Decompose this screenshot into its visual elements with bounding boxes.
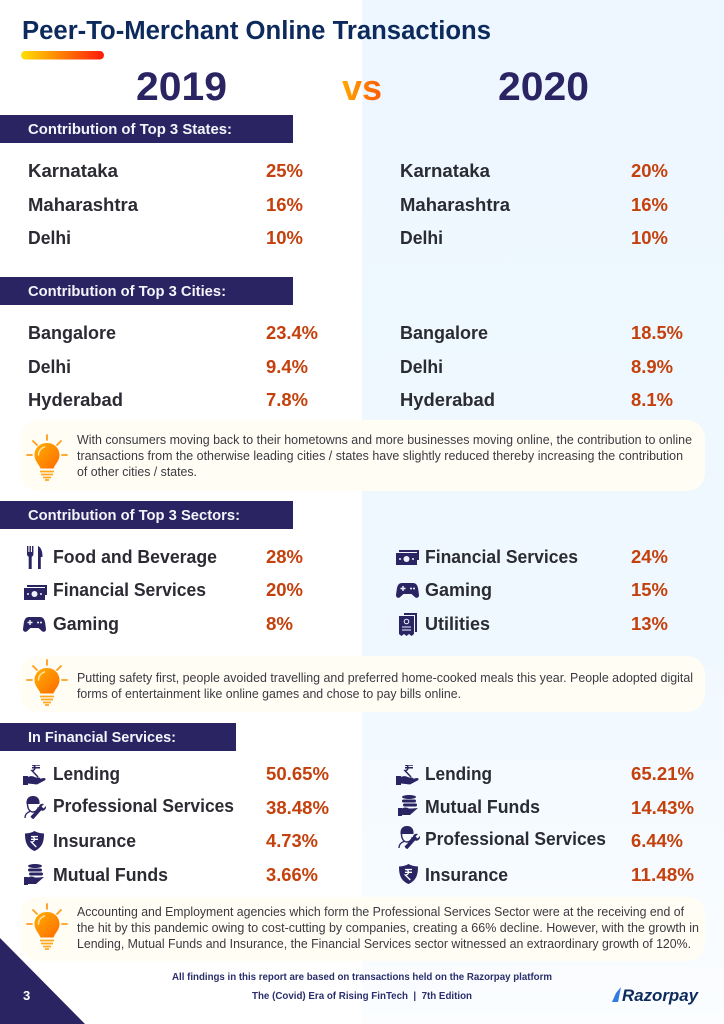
sectors 2019: Food and Beverage [53,547,217,567]
cities 2020: Bangalore [400,323,488,343]
callout: cities insight: of other cities / states. [77,465,197,479]
icon: gamepad [23,617,46,632]
callout: financial services insight [20,897,705,961]
section header: financial services: In Financial Services: [28,730,176,746]
states 2019: Karnataka [28,161,119,181]
year heading 2020: 2020 [498,65,589,109]
cities 2020 [400,323,683,410]
states 2020: 10% [631,228,668,248]
cities 2020: 18.5% [631,323,683,343]
financial services 2020: Mutual Funds [425,797,540,817]
financial services 2020 [396,764,694,885]
sectors 2020: Utilities [425,614,490,634]
icon: lending [396,765,419,785]
callout: sectors insight: Putting safety first, people avoided travelling and preferred home-cooked meals this year. People adopted digital [77,671,693,685]
icon: cash [24,585,47,600]
cities 2019: 23.4% [266,323,318,343]
callout: financial services insight: the hit by this pandemic owing to cost-cutting by companies, creating a 66% decline. However, with the growth in [77,921,699,935]
section header: financial services [0,723,236,751]
sectors 2020 [396,547,668,636]
cities 2019 [28,323,318,410]
states 2019: 25% [266,161,303,181]
financial services 2020: 14.43% [631,798,694,818]
callout: financial services insight: Lending, Mutual Funds and Insurance, the Financial Services sector witnessed an extraordinary growth of 120%. [77,937,691,951]
financial services 2020: Lending [425,764,492,784]
section header: top 3 sectors [0,501,293,529]
states 2019: Delhi [28,228,71,248]
section header: top 3 states [0,115,293,143]
section header: top 3 cities [0,277,293,305]
corner triangle [0,938,85,1024]
cities 2020: Delhi [400,357,443,377]
icon: mutual funds [24,864,44,885]
financial services 2020: 6.44% [631,831,683,851]
callout: cities insight [20,420,705,491]
states 2020: Delhi [400,228,443,248]
financial services 2019: Insurance [53,831,136,851]
callout: cities insight: transactions from the otherwise leading cities / states have slightly reduced thereby increasing the contribution [77,449,683,463]
financial services 2019: Professional Services [53,796,234,816]
sectors 2019: 28% [266,547,303,567]
icon: fork and knife [27,546,42,569]
section header: top 3 cities: Contribution of Top 3 Cities: [28,284,226,300]
cities 2020: Hyderabad [400,390,495,410]
title underline [21,51,104,60]
icon: cash [396,550,419,565]
title: Peer-To-Merchant Online Transactions [22,17,491,45]
states 2020: Karnataka [400,161,491,181]
footer note: All findings in this report are based on transactions held on the Razorpay platform [172,972,552,983]
cities 2019: Hyderabad [28,390,123,410]
cities 2020: 8.9% [631,357,673,377]
states 2019 [28,161,303,248]
cities 2019: Bangalore [28,323,116,343]
financial services 2020: 11.48% [631,865,694,885]
states 2020: 20% [631,161,668,181]
section header: top 3 states: Contribution of Top 3 States: [28,122,232,138]
sectors 2020: 13% [631,614,668,634]
callout: sectors insight: forms of entertainment like online games and chose to pay bills online. [77,687,461,701]
financial services 2019: 3.66% [266,865,318,885]
vs label: vs [342,67,382,108]
icon: lending [23,765,46,785]
page number: 3 [23,988,30,1003]
sectors 2019 [23,546,303,634]
sectors 2020: Financial Services [425,547,578,567]
callout: cities insight: With consumers moving back to their hometowns and more businesses moving online, the contribution to online [77,433,692,447]
states 2020: 16% [631,195,668,215]
sectors 2020: Gaming [425,580,492,600]
states 2019: Maharashtra [28,195,139,215]
right column background [362,0,724,1024]
callout: sectors insight [20,656,705,712]
sectors 2019: Financial Services [53,580,206,600]
footer edition: The (Covid) Era of Rising FinTech | 7th Edition [252,991,472,1002]
cities 2019: Delhi [28,357,71,377]
icon: mutual funds [398,795,418,816]
states 2019: 16% [266,195,303,215]
icon: gamepad [396,583,419,598]
icon: shield [25,831,44,851]
states 2020: Maharashtra [400,195,511,215]
sectors 2019: Gaming [53,614,119,634]
states 2020 [400,161,668,248]
sectors 2019: 20% [266,580,303,600]
icon: shield [399,864,418,884]
financial services 2020: Insurance [425,865,508,885]
financial services 2019: 38.48% [266,798,329,818]
section header: top 3 sectors: Contribution of Top 3 Sectors: [28,508,240,524]
icon: utility bill [399,613,417,636]
financial services 2019 [23,764,329,885]
sectors 2020: 15% [631,580,668,600]
icon: professional [399,826,420,849]
sectors 2020: 24% [631,547,668,567]
cities 2020: 8.1% [631,390,673,410]
icon: professional [25,796,46,819]
financial services 2019: Lending [53,764,120,784]
callout: financial services insight: Accounting and Employment agencies which form the Professional Services Sector were at the receiving end of [77,905,685,919]
sectors 2019: 8% [266,614,293,634]
states 2019: 10% [266,228,303,248]
financial services 2019: Mutual Funds [53,865,168,885]
financial services 2019: 50.65% [266,764,329,784]
financial services 2019: 4.73% [266,831,318,851]
cities 2019: 9.4% [266,357,308,377]
financial services 2020: Professional Services [425,829,606,849]
financial services 2020: 65.21% [631,764,694,784]
cities 2019: 7.8% [266,390,308,410]
year heading 2019: 2019 [136,65,227,109]
logo: Razorpay: Razorpay [622,986,700,1005]
